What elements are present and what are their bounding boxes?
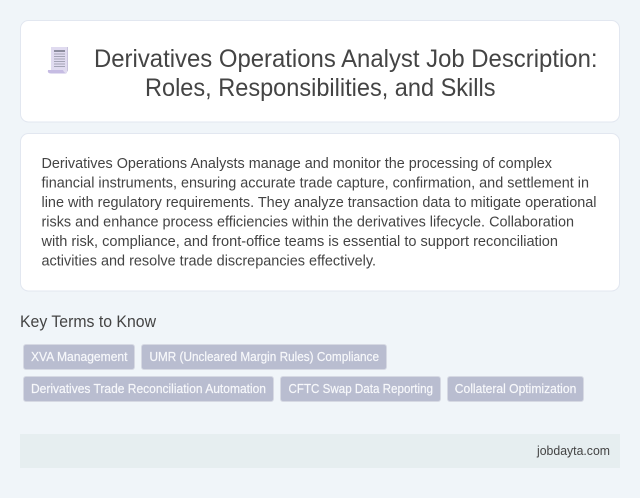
tag: collateral optimization xyxy=(448,376,584,402)
panel: description xyxy=(20,134,620,291)
description text: line with regulatory requirements. They analyze transaction data to mitigate operational xyxy=(42,195,596,211)
tag: UMR compliance: UMR (Uncleared Margin Rules) Compliance xyxy=(150,350,379,364)
panel: title card xyxy=(20,20,620,122)
tag: XVA Management xyxy=(24,344,134,370)
description text: with risk, compliance, and front-office teams is essential to support reconciliation xyxy=(41,234,558,250)
tag: collateral optimization: Collateral Optimization xyxy=(455,382,576,396)
tag: XVA Management: XVA Management xyxy=(31,350,128,364)
description text: financial instruments, ensuring accurate trade capture, confirmation, and settlement in xyxy=(42,176,589,192)
description text: risks and enhance process efficiencies within the derivatives lifecycle. Collaboration xyxy=(42,214,574,230)
tag: reconciliation automation: Derivatives Trade Reconciliation Automation xyxy=(31,382,266,396)
tag: UMR compliance xyxy=(142,344,386,370)
tag: CFTC reporting xyxy=(280,376,440,402)
heading: key terms: Key Terms to Know xyxy=(20,313,156,331)
title xyxy=(94,45,598,102)
icon: document scroll xyxy=(48,47,68,74)
title: Roles, Responsibilities, and Skills xyxy=(145,74,496,102)
tag: reconciliation automation xyxy=(24,376,274,402)
description text: activities and resolve trade discrepancies effectively. xyxy=(42,254,376,270)
footer bar: jobdayta.com xyxy=(536,444,610,458)
title: Derivatives Operations Analyst Job Description: xyxy=(94,45,598,73)
description text: Derivatives Operations Analysts manage and monitor the processing of complex xyxy=(42,156,553,172)
footer bar xyxy=(20,434,620,468)
tag: CFTC reporting: CFTC Swap Data Reporting xyxy=(288,382,433,396)
description text xyxy=(41,156,597,270)
